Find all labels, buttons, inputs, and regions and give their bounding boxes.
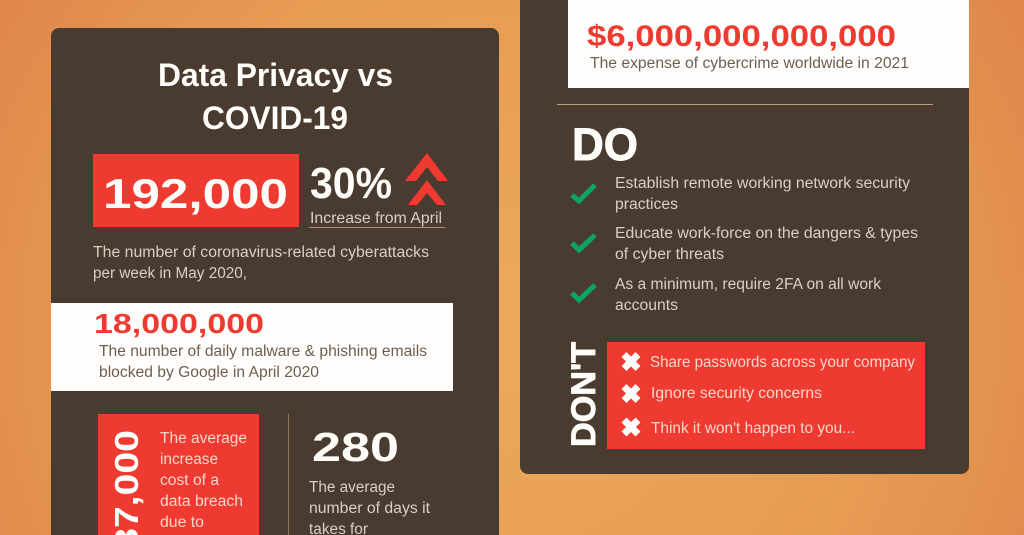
stat: 30% increase — [309, 159, 445, 228]
title: Data Privacy vs — [158, 57, 393, 93]
heading: DON'T: DON'T — [565, 342, 603, 447]
do item 2: of cyber threats — [615, 246, 724, 263]
do item 2 — [572, 225, 918, 263]
don't list red box — [607, 342, 925, 449]
icon: cross — [624, 420, 638, 434]
text: cyberattacks description — [93, 244, 429, 282]
do item 3: accounts — [615, 297, 678, 314]
do item 3 — [572, 276, 881, 314]
stat: 18,000,000 white band: blocked by Google in April 2020 — [99, 364, 319, 381]
stat: 280 days: The average — [309, 479, 395, 496]
stat: 18,000,000 white band — [51, 303, 453, 391]
icon: check — [572, 185, 595, 201]
stat: 30% increase: 30% — [310, 159, 392, 208]
panel: right do and don't — [520, 0, 969, 474]
stat: 18,000,000 white band: The number of daily malware & phishing emails — [99, 343, 427, 360]
icon: cross — [624, 386, 638, 400]
don't list red box: Share passwords across your company — [650, 354, 915, 371]
stat: data breach cost red box — [98, 414, 259, 535]
stat: 280 days: number of days it — [309, 500, 431, 517]
icon: double up arrow — [405, 153, 448, 205]
do item 3: As a minimum, require 2FA on all work — [615, 276, 881, 293]
stat: cybercrime expense white box — [568, 0, 969, 88]
stat: data breach cost red box: data breach — [160, 493, 243, 510]
stat: 192,000 red box: 192,000 — [103, 170, 288, 217]
do item 2: Educate work-force on the dangers & types — [615, 225, 918, 242]
stat: data breach cost red box: increase — [160, 451, 218, 468]
stat: data breach cost red box: The average — [160, 430, 247, 447]
text: cyberattacks description: per week in May 2020, — [93, 265, 247, 282]
title — [158, 57, 393, 136]
do item 1: practices — [615, 196, 678, 213]
text: cyberattacks description: The number of coronavirus-related cyberattacks — [93, 244, 429, 261]
icon: check — [572, 285, 595, 300]
don't list red box: Think it won't happen to you... — [651, 420, 855, 437]
icon: check — [572, 235, 595, 250]
icon: cross — [624, 354, 638, 368]
don't list red box: Ignore security concerns — [651, 385, 822, 402]
title: COVID-19 — [202, 100, 348, 136]
heading: DO: DO — [572, 119, 638, 170]
do item 1: Establish remote working network security — [615, 175, 910, 192]
stat: data breach cost red box: cost of a — [160, 472, 219, 489]
stat: 30% increase: Increase from April — [310, 210, 442, 227]
stat: cybercrime expense white box: The expense of cybercrime worldwide in 2021 — [590, 55, 909, 72]
stat: cybercrime expense white box: $6,000,000,000,000 — [587, 20, 896, 53]
stat: 192,000 red box — [93, 154, 299, 227]
stat: 280 days: 280 — [312, 424, 399, 470]
stat: 280 days — [309, 424, 431, 535]
do item 1 — [572, 175, 910, 213]
stat: 18,000,000 white band: 18,000,000 — [94, 308, 264, 339]
panel: left statistics — [51, 28, 499, 535]
stat: data breach cost red box: due to — [160, 514, 204, 531]
